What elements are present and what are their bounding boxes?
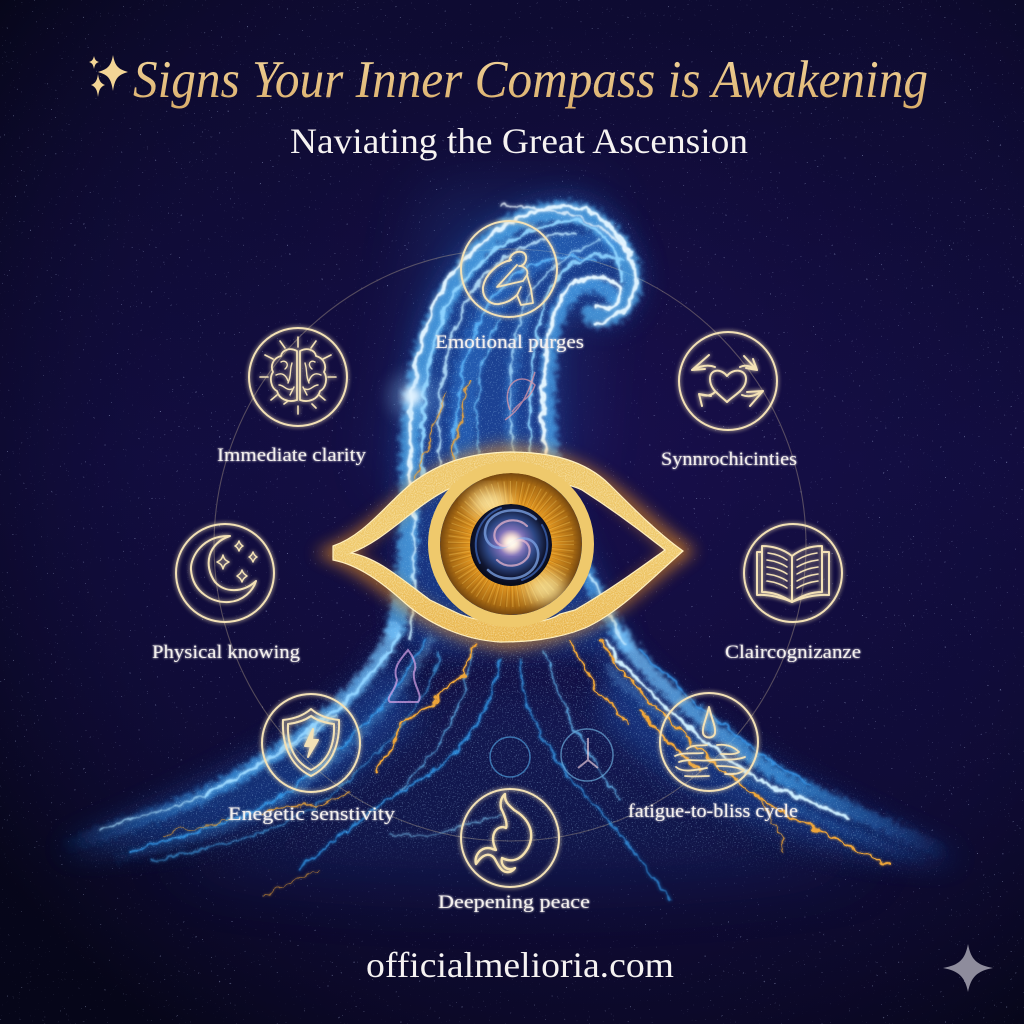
item: Immediate clarity — [217, 328, 367, 466]
faint wave glyphs — [389, 372, 613, 781]
lower wave strands — [100, 635, 850, 900]
item: Deepening peace — [438, 789, 590, 913]
icon: moon and stars — [176, 524, 274, 622]
iris — [440, 473, 582, 615]
item: fatigue-to-bliss cycle — [628, 693, 798, 822]
icon: open book — [744, 524, 842, 622]
item: Claircognizance — [725, 524, 861, 663]
subtitle: Naviating the Great Ascension — [290, 121, 748, 161]
icon: heart with arrows — [679, 332, 777, 430]
item: Emotional purges — [435, 221, 584, 353]
label: fatigue-to-bliss cycle — [628, 801, 798, 822]
eye glow — [333, 452, 683, 642]
golden eye — [333, 452, 683, 642]
label: Physical knowing — [152, 642, 301, 663]
star flare — [388, 372, 436, 420]
label: Immediate clarity — [217, 445, 367, 466]
upper wave strands — [410, 205, 636, 645]
label: Enegetic senstivity — [228, 804, 396, 825]
eye band grain — [333, 452, 683, 642]
item: Physical knowing — [152, 524, 301, 663]
iris ring — [434, 467, 588, 621]
wave particles — [77, 190, 944, 874]
icon: shield with bolt — [262, 694, 360, 792]
icon: droplet over water — [660, 693, 758, 791]
watermark star — [943, 944, 993, 992]
title: Signs Your Inner Compass is Awakening — [133, 51, 928, 109]
label: Synnrochicinties — [661, 449, 797, 470]
footer url: officialmelioria.com — [366, 945, 674, 985]
broad fuzzy wave bands — [70, 211, 940, 860]
item: Synchronicities — [661, 332, 797, 470]
orbit ring — [214, 249, 806, 841]
item: Energetic sensitivity — [228, 694, 396, 825]
energy wave glow — [60, 190, 960, 890]
icon: stomach — [461, 789, 559, 887]
label: Emotional purges — [435, 332, 584, 353]
golden lightning — [165, 370, 890, 900]
eye lens band — [333, 452, 683, 642]
title icon: sparkles — [89, 55, 128, 97]
icon: curled figure — [461, 221, 557, 317]
label: Deepening peace — [438, 892, 590, 913]
label: Claircognizanze — [725, 642, 861, 663]
icon: radiant brain — [249, 328, 347, 426]
galaxy pupil — [470, 504, 552, 586]
